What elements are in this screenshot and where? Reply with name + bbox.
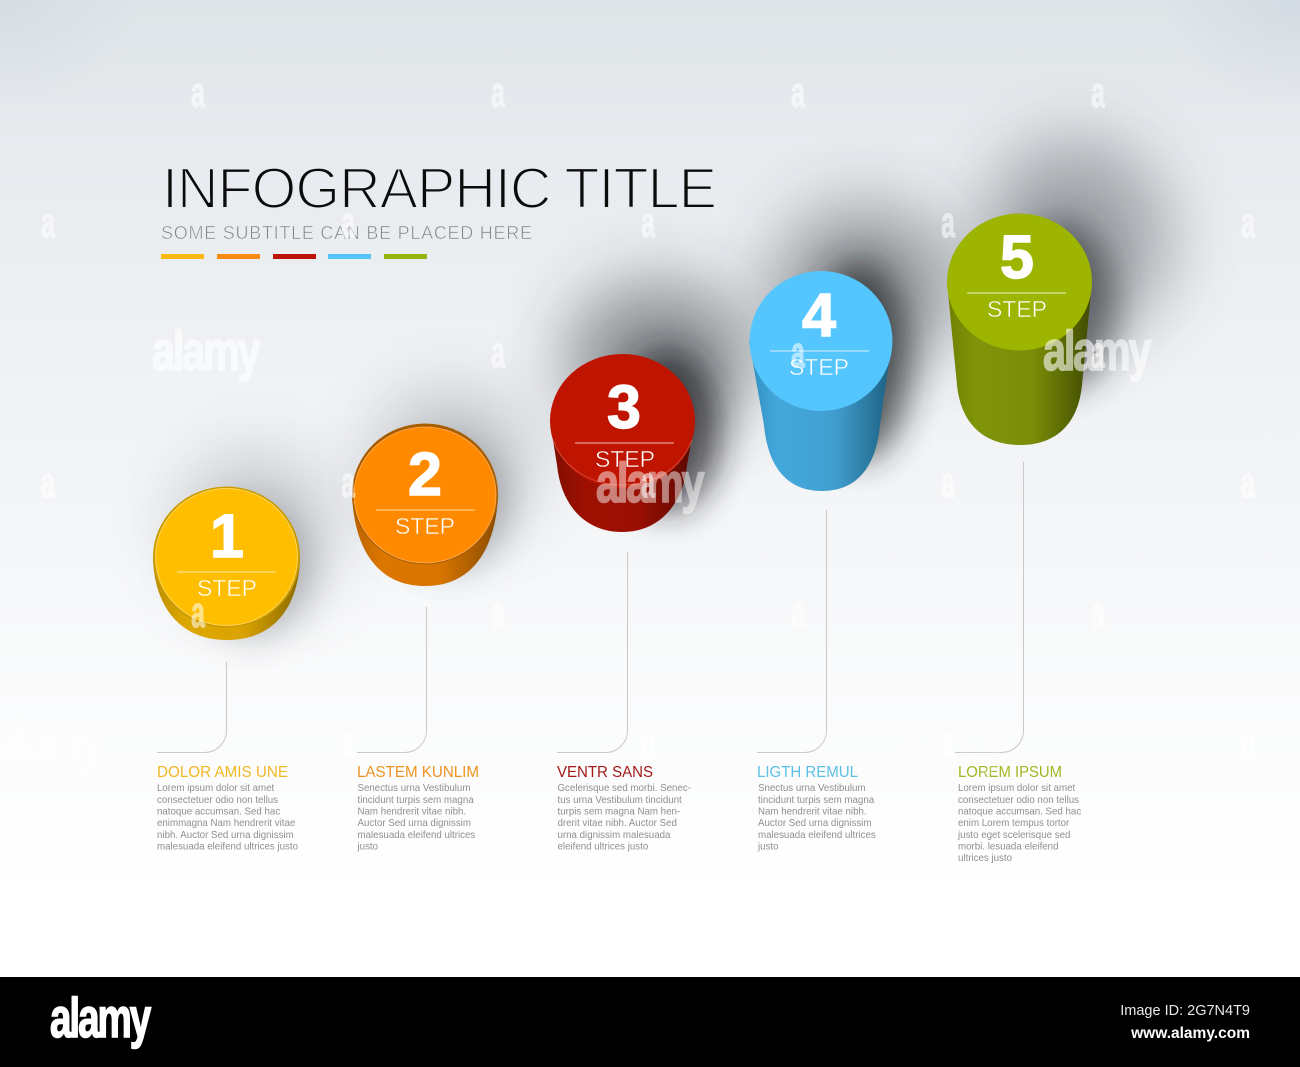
step 4 cylinder: STEP [789,354,849,380]
text block: step 1: malesuada eleifend ultrices justo [157,842,298,852]
step 5 cylinder [947,214,1092,445]
footer bar: alamy [50,987,151,1050]
text block: step 3: VENTR SANS [557,764,653,781]
text block: step 1: DOLOR AMIS UNE [157,764,288,781]
watermark overlays: a [1091,68,1106,117]
step 5 cylinder: STEP [987,296,1047,322]
watermark overlays: a [791,588,806,637]
watermark overlays: a [191,588,206,637]
watermark overlays: a [641,198,656,247]
text block: step 3 [557,764,691,852]
text block: step 4: malesuada eleifend ultrices [758,830,876,841]
text block: step 1: Lorem ipsum dolor sit amet [157,783,275,794]
text block: step 2: Nam hendrerit vitae nibh. [358,806,466,818]
text block: step 3: drerit vitae nibh. Auctor Sed [558,818,677,829]
watermark overlays: alamy [596,452,705,515]
watermark overlays: a [341,198,356,247]
colour key bars [161,254,427,259]
watermark overlays: a [641,718,656,767]
text block: step 3: tus urna Vestibulum tincidunt [558,795,682,806]
text block: step 4: Auctor Sed urna dignissim [758,818,871,829]
watermark overlays: a [1241,198,1256,247]
watermark overlays: a [491,328,506,377]
text block: step 4 [757,764,876,852]
text block: step 4: Snectus urna Vestibulum [758,783,866,794]
watermark overlays: a [941,458,956,507]
watermark overlays: a [1091,328,1106,377]
watermark overlays: a [641,458,656,507]
text block: step 1: enimmagna Nam hendrerit vitae [157,818,295,829]
text block: step 5: LOREM IPSUM [958,764,1062,781]
text block: step 2: LASTEM KUNLIM [357,764,479,781]
watermark overlays: a [491,588,506,637]
cylinder cast shadows [175,140,1170,638]
step 2 cylinder: 2 [408,440,442,508]
text block: step 2: malesuada eleifend ultrices [358,830,475,841]
watermark overlays: a [41,198,56,247]
footer bar [0,977,1300,1067]
text block: step 5: Lorem ipsum dolor sit amet [958,783,1076,794]
text block: step 5: consectetuer odio non tellus [958,795,1079,806]
text block: step 4: justo [757,842,779,852]
step 1 cylinder [153,486,300,640]
text block: step 5: ultrices justo [958,853,1012,864]
watermark overlays: alamy [152,320,261,383]
text block: step 4: Nam hendrerit vitae nibh. [758,806,867,818]
text block: step 1: nibh. Auctor Sed urna dignissim [157,830,294,841]
step 2 cylinder [352,424,498,586]
step 2 cylinder: STEP [395,513,455,539]
watermark overlays: a [791,328,806,377]
watermark overlays: a [1241,718,1256,767]
watermark overlays: alamy [896,713,1005,776]
subtitle: SOME SUBTITLE CAN BE PLACED HERE [161,223,532,243]
text block: step 5 [957,764,1081,864]
text block: step 3: Gcelerisque sed morbi. Senec- [558,783,691,794]
step 3 cylinder: STEP [595,446,655,472]
text block: step 3: urna dignissim malesuada [558,830,671,841]
text block: step 5: natoque accumsan. Sed hac [958,806,1081,818]
text block: step 1: natoque accumsan. Sed hac [157,806,280,818]
watermark overlays: a [941,718,956,767]
watermark overlays: a [41,458,56,507]
step 1 cylinder: STEP [197,575,257,601]
text block: step 3: turpis sem magna Nam hen- [558,806,680,818]
footer bar: Image ID: 2G7N4T9 [1120,1003,1250,1019]
text block: step 2 [356,764,479,852]
text block: step 5: enim Lorem tempus tortor [958,818,1070,829]
text block: step 3: eleifend ultrices justo [558,842,648,852]
step 5 cylinder: 5 [1000,223,1034,291]
leader lines [157,462,1024,752]
text block: step 4: tincidunt turpis sem magna [758,795,875,806]
step 3 cylinder: 3 [607,373,641,441]
watermark overlays: a [791,68,806,117]
text block: step 5: justo eget scelerisque sed [957,830,1070,841]
text block: step 4: LIGTH REMUL [757,764,858,781]
watermark overlays: a [941,198,956,247]
watermark overlays: a [491,68,506,117]
text block: step 2: Senectus urna Vestibulum [358,783,470,794]
watermark overlays: a [1091,588,1106,637]
watermark overlays: alamy [1043,320,1152,383]
step 1 cylinder: 1 [210,502,244,570]
step 4 cylinder: 4 [802,281,836,349]
watermark overlays: a [1241,458,1256,507]
watermark overlays: a [191,68,206,117]
watermark overlays [0,68,1256,776]
footer bar: www.alamy.com [1130,1025,1250,1042]
text block: step 2: justo [356,842,378,852]
text block: step 2: tincidunt turpis sem magna [358,795,474,806]
text block: step 5: morbi. lesuada eleifend [958,842,1058,852]
title: INFOGRAPHIC TITLE [162,157,717,221]
watermark overlays: a [341,718,356,767]
text block: step 1 [157,764,298,852]
text block: step 1: consectetuer odio non tellus [157,795,278,806]
watermark overlays: a [341,458,356,507]
text block: step 2: Auctor Sed urna dignissim [358,818,471,829]
step 4 cylinder [749,271,892,491]
step 3 cylinder [550,354,695,532]
